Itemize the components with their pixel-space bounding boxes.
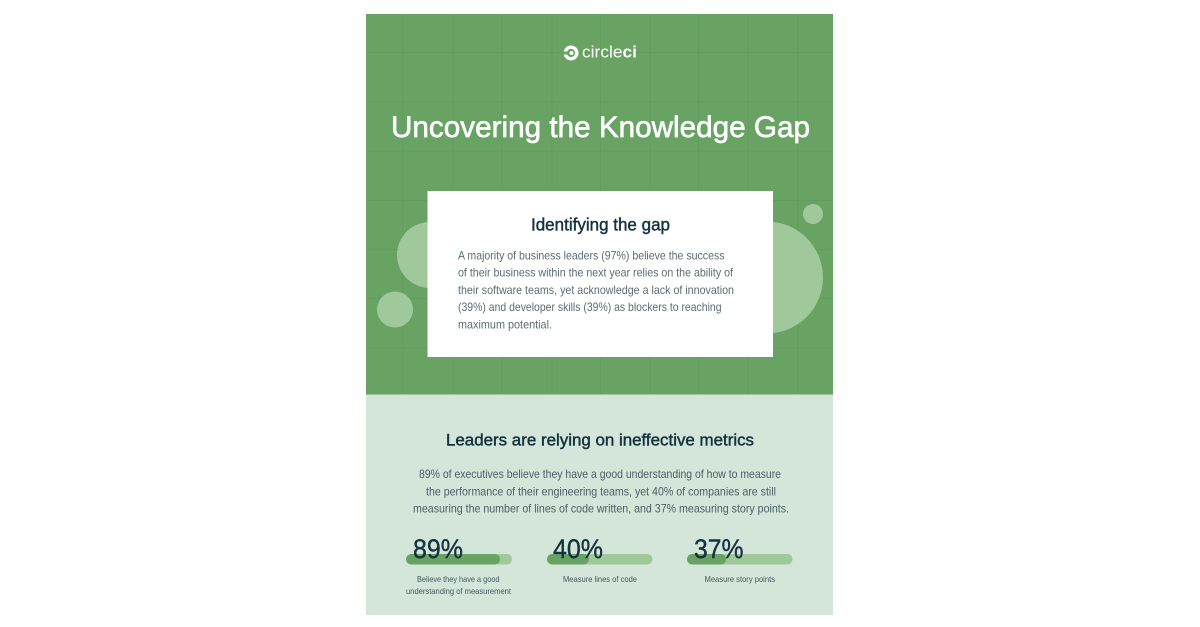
metrics paragraph: 89% of executives believe they have a good understanding of how to measure <box>419 467 781 481</box>
stat: 89%: understanding of measurement <box>406 586 512 596</box>
card body text: their software teams, yet acknowledge a lack of innovation <box>458 283 734 297</box>
stat: 89%: Believe they have a good <box>417 574 500 584</box>
stat: 40%: Measure lines of code <box>563 574 637 584</box>
stat: 37%: Measure story points <box>704 574 775 584</box>
stat: 89% <box>406 534 512 596</box>
panel: identifying the gap card <box>428 191 773 357</box>
metrics heading: Leaders are relying on ineffective metrics <box>446 432 754 450</box>
stat: 40% <box>547 534 652 584</box>
card body text: of their business within the next year relies on the ability of <box>458 266 734 280</box>
panel: green header <box>366 14 833 394</box>
card body text: maximum potential. <box>458 318 552 332</box>
icon: circleci mark <box>562 47 577 59</box>
metrics paragraph <box>413 467 789 516</box>
title: Uncovering the Knowledge Gap <box>391 111 810 144</box>
card body text: A majority of business leaders (97%) believe the success <box>458 248 724 262</box>
logo: circleci <box>562 42 637 62</box>
stat: 37%: 37% <box>694 534 744 564</box>
decorative circles <box>377 204 823 334</box>
stat: 40%: 40% <box>553 534 603 564</box>
metrics paragraph: measuring the number of lines of code written, and 37% measuring story points. <box>413 502 789 516</box>
card heading: Identifying the gap <box>531 214 670 234</box>
card body text <box>458 248 734 332</box>
panel: metrics section <box>366 394 833 615</box>
logo wordmark: circleci <box>582 42 637 62</box>
metrics paragraph: the performance of their engineering teams, yet 40% of companies are still <box>426 484 776 498</box>
card body text: (39%) and developer skills (39%) as blockers to reaching <box>458 300 722 314</box>
stat: 37% <box>687 534 792 584</box>
stat: 89%: 89% <box>413 534 463 564</box>
